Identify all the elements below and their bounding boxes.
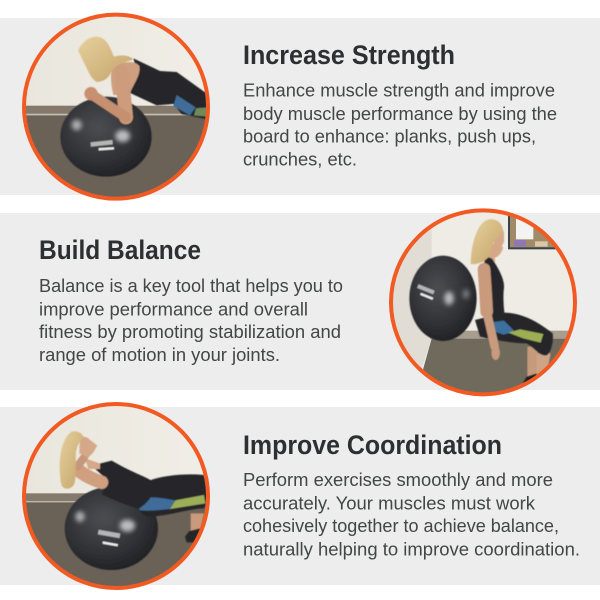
body text: increase strength	[243, 80, 557, 170]
body text: improve coordination: Perform exercises smoothly and more	[243, 470, 553, 490]
panel: build balance	[0, 213, 600, 390]
text block: improve coordination	[243, 430, 580, 560]
body text: build balance: Balance is a key tool that helps you to	[39, 276, 343, 296]
body text: build balance	[39, 276, 343, 365]
body text: build balance: fitness by promoting stabilization and	[39, 322, 341, 342]
photo circle: back extension on ball	[20, 400, 213, 592]
panel: increase strength	[0, 18, 600, 195]
body text: improve coordination: naturally helping to improve coordination.	[243, 540, 580, 560]
body text: build balance: improve performance and overall	[39, 300, 308, 320]
body text: increase strength: Enhance muscle strength and improve	[243, 80, 555, 100]
body text: build balance: range of motion in your joints.	[39, 345, 280, 365]
body text: increase strength: body muscle performance by using the	[243, 104, 557, 124]
heading: Build Balance: Build Balance	[39, 235, 201, 265]
photo circle: wall squat with ball	[387, 207, 580, 400]
text block: build balance	[39, 235, 343, 365]
body text: increase strength: board to enhance: planks, push ups,	[243, 126, 536, 146]
heading: Improve Coordination: Improve Coordination	[243, 430, 502, 460]
panel: improve coordination	[0, 407, 600, 585]
body text: increase strength: crunches, etc.	[243, 150, 357, 170]
photo circle: plank on stability ball	[20, 10, 213, 202]
body text: improve coordination	[243, 470, 580, 560]
heading: Increase Strength: Increase Strength	[243, 40, 455, 70]
body text: improve coordination: accurately. Your muscles must work	[243, 494, 536, 514]
text block: increase strength	[243, 40, 557, 170]
body text: improve coordination: cohesively together to achieve balance,	[243, 516, 559, 536]
